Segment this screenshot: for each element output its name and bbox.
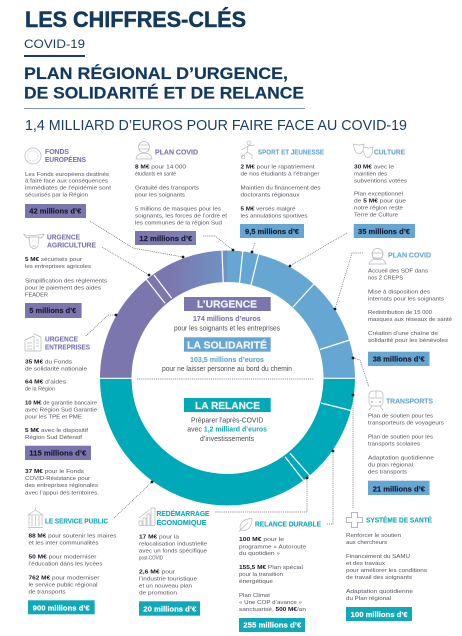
panel: plan covid solidarité: 38 millions d’€: [373, 355, 425, 364]
center: l'urgence: pour les soignants et les entreprises: [174, 325, 280, 332]
center: la solidarité: LA SOLIDARITÉ: [187, 338, 267, 351]
panel: le service public: 762 M€ pour moderniser: [28, 575, 100, 581]
panel: plan covid solidarité: Création d’une chaîne de: [368, 331, 438, 337]
icon: office buildings: [25, 334, 41, 351]
panel: urgence agriculture: Simplification des règlements: [25, 279, 107, 285]
panel: transports: Plan de soutien pour les: [368, 434, 433, 440]
panel: plan covid solidarité: internats pour les soignants: [368, 296, 444, 302]
panel: fonds européens: [25, 148, 111, 218]
panel: urgence entreprises: URGENCE: [45, 336, 78, 343]
panel: plan covid solidarité: Redistribution de 15 000: [368, 310, 432, 316]
panel: redémarrage économique: [139, 508, 210, 616]
panel: fonds européens: Les Fonds européens destinés: [25, 172, 109, 178]
panel: le service public: 900 millions d’€: [33, 603, 90, 612]
panel: plan covid urgence: 12 millions d’€: [139, 234, 193, 243]
panel: redémarrage économique: 17 M€ pour la: [139, 534, 180, 540]
panel: système de santé: SYSTÈME DE SANTÉ: [366, 516, 432, 525]
panel: urgence entreprises: avec Région Sud Garantie: [25, 407, 97, 413]
panel: urgence agriculture: 5 millions d’€: [29, 306, 77, 315]
panel: sport et jeunesse: 2 M€ pour le rapatriement: [240, 164, 315, 170]
icon: train: [369, 391, 383, 410]
panel: système de santé: pour améliorer les conditions: [346, 568, 427, 574]
panel: culture: Plan exceptionnel: [354, 192, 403, 198]
panel: culture: 30 M€ avec le: [354, 164, 394, 170]
panel: transports: du plan régional: [368, 462, 413, 468]
panel: plan covid solidarité: solidarité pour les bénévoles: [368, 338, 448, 344]
panel: plan covid solidarité: Mise à disposition des: [368, 289, 430, 295]
panel: transports: transports scolaires: [368, 441, 420, 447]
panel: fonds européens: immédiates de l’épidémie sont: [25, 186, 111, 192]
panel: fonds européens: EUROPÉENS: [45, 155, 86, 164]
icon: cow head: [23, 234, 45, 248]
panel: urgence entreprises: 5 M€ avec le dispositif: [25, 428, 88, 434]
panel: le service public: 88 M€ pour soutenir les maires: [28, 533, 117, 539]
panel: transports: des transports: [368, 469, 407, 475]
panel: transports: TRANSPORTS: [386, 398, 433, 405]
panel: urgence entreprises: 35 M€ du Fonds: [25, 360, 72, 366]
panel: système de santé: du Plan régional: [346, 596, 391, 602]
panel: culture: maintien des: [354, 171, 387, 177]
icon: rising bars: [139, 508, 155, 526]
panel: urgence agriculture: 5 M€ sécurisés pour: [25, 257, 82, 263]
center: la relance: d’investissements: [200, 436, 254, 443]
panel: plan covid urgence: Gratuité des transports: [135, 185, 199, 191]
panel: urgence entreprises: COVID-Résistance pour: [25, 476, 90, 482]
panel: redémarrage économique: 2,6 M€ pour: [139, 570, 175, 576]
panel: relance durable: programme « Autoroute: [239, 544, 306, 550]
icon: footballer: [241, 141, 254, 159]
center: la solidarité: 103,5 millions d’euros: [190, 355, 264, 364]
panel: urgence entreprises: ENTREPRISES: [45, 345, 90, 352]
panel: urgence entreprises: 115 millions d’€: [29, 449, 87, 458]
panel: culture: notre région reste: [354, 206, 403, 212]
panel: culture: de 5 M€ pour que: [354, 199, 406, 205]
panel: relance durable: « Une COP d’avance »: [239, 600, 302, 606]
panel: plan covid solidarité: [368, 248, 452, 366]
panel: le service public: le service public régional: [28, 582, 98, 588]
panel: système de santé: aux chercheurs: [346, 540, 387, 546]
panel: sport et jeunesse: doctorants régionaux: [240, 192, 300, 198]
icon: euro stars circle: [25, 148, 41, 164]
panel: plan covid urgence: 5 millions de masques pour les: [135, 206, 221, 212]
panel: urgence entreprises: [25, 334, 99, 496]
panel: redémarrage économique: REDÉMARRAGE: [156, 509, 210, 518]
panel: redémarrage économique: de promotion: [139, 591, 177, 597]
panel: sport et jeunesse: Maintien du financement des: [240, 185, 321, 191]
panel: redémarrage économique: post-COVID: [139, 556, 163, 562]
panel: culture: CULTURE: [374, 149, 405, 156]
panel: transports: Adaptation quotidienne: [368, 455, 434, 461]
heading: plan régional: [24, 64, 305, 109]
panel: urgence entreprises: des entreprises régionales: [25, 483, 98, 489]
panel: culture: subventions votées: [354, 178, 407, 184]
panel: plan covid solidarité: nos 2 CREPS: [368, 275, 403, 281]
panel: plan covid urgence: 8 M€ pour 14 000: [135, 164, 186, 170]
center: la solidarité: [162, 337, 292, 373]
panel: le service public: de transports: [28, 589, 66, 595]
panel: urgence entreprises: pour les TPE et PME: [25, 414, 82, 420]
panel: plan covid urgence: [135, 142, 227, 245]
panel: sport et jeunesse: les annulations sportives: [240, 213, 308, 219]
panel: transports: transporteurs de voyageurs: [368, 421, 444, 427]
panel: sport et jeunesse: [240, 141, 324, 238]
panel: relance durable: [239, 518, 321, 632]
panel: relance durable: pour la transition: [239, 572, 283, 578]
panel: urgence agriculture: les entreprises agricoles: [25, 264, 91, 270]
panel: plan covid urgence: les communes de la région Sud: [135, 220, 222, 226]
panel: sport et jeunesse: 5 M€ versés malgré: [240, 206, 296, 212]
icon: theatre masks: [354, 144, 373, 158]
panel: urgence entreprises: 37 M€ pour le Fonds: [25, 469, 84, 475]
center: l'urgence: 174 millions d’euros: [193, 314, 261, 323]
title: COVID-19: [24, 37, 85, 51]
panel: plan covid solidarité: Accueil des SDF dans: [368, 268, 428, 274]
center: la relance: avec 1,2 milliard d’euros: [187, 427, 267, 434]
panel: redémarrage économique: ÉCONOMIQUE: [156, 518, 207, 527]
panel: sport et jeunesse: 9,5 millions d’€: [245, 227, 300, 236]
center: la relance: LA RELANCE: [195, 401, 260, 412]
panel: urgence agriculture: pour le paiement des aides: [25, 286, 101, 292]
panel: relance durable: sanctuarisé, 500 M€ /an: [239, 607, 306, 613]
panel: relance durable: 255 millions d’€: [243, 621, 302, 630]
panel: culture: 35 millions d’€: [358, 227, 411, 236]
panel: fonds européens: FONDS: [45, 149, 69, 156]
panel: transports: Plan de soutien pour les: [368, 414, 433, 420]
panel: transports: 21 millions d’€: [373, 484, 426, 493]
panel: relance durable: du quotidien »: [239, 551, 280, 557]
panel: relance durable: énergétique: [239, 579, 273, 585]
heading: plan régional: PLAN RÉGIONAL D’URGENCE,: [24, 64, 288, 83]
icon: leaf: [239, 518, 252, 532]
panel: sport et jeunesse: SPORT ET JEUNESSE: [258, 149, 324, 156]
subtitle: 1,4 MILLIARD D’EUROS POUR FAIRE FACE AU COVID-19: [25, 118, 407, 134]
panel: redémarrage économique: 20 millions d’€: [143, 605, 197, 614]
icon: masked person: [369, 248, 386, 264]
panel: urgence entreprises: de solidarité nationale: [25, 367, 87, 373]
panel: plan covid urgence: soignants, les forces de l’ordre et: [135, 213, 227, 219]
panel: urgence entreprises: de la Région: [25, 386, 55, 392]
panel: système de santé: Financement du SAMU: [346, 554, 410, 560]
panel: fonds européens: à faire face aux conséquences: [25, 179, 108, 185]
center: l'urgence: [174, 297, 280, 332]
panel: système de santé: [346, 512, 432, 621]
panel: le service public: [28, 508, 117, 614]
panel: redémarrage économique: et un nouveau plan: [139, 584, 192, 590]
leader lines: [86, 221, 369, 524]
panel: relance durable: 155,5 M€ Plan spécial: [239, 565, 303, 571]
panel: urgence entreprises: avec l’appui des territoires.: [25, 490, 99, 496]
panel: urgence entreprises: Région Sud Défensif: [25, 435, 82, 441]
panel: plan covid urgence: étudiants en santé: [135, 171, 176, 177]
panel: sport et jeunesse: de nos étudiants à l’étranger: [240, 171, 320, 177]
panel: le service public: l’éducation dans les lycées: [28, 561, 103, 567]
icon: masked doctor: [136, 142, 152, 159]
panel: fonds européens: 42 millions d’€: [29, 207, 82, 216]
center: l'urgence: L’URGENCE: [197, 300, 257, 311]
panel: le service public: LE SERVICE PUBLIC: [45, 518, 108, 525]
icon: medical cross: [346, 512, 362, 528]
panel: relance durable: Plan Climat: [239, 593, 270, 599]
panel: culture: [354, 144, 415, 238]
panel: système de santé: 100 millions d’€: [351, 610, 408, 619]
panel: urgence agriculture: URGENCE: [47, 235, 80, 242]
heading: plan régional: DE SOLIDARITÉ ET DE RELANCE: [24, 84, 304, 103]
panel: plan covid urgence: pour les soignants: [135, 192, 185, 198]
panel: plan covid solidarité: PLAN COVID: [388, 253, 431, 260]
panel: relance durable: RELANCE DURABLE: [255, 522, 321, 529]
panel: système de santé: et des travaux: [346, 561, 385, 567]
panel: système de santé: Renforcer le soutien: [346, 533, 401, 539]
title: [24, 7, 246, 57]
icon: public building: [28, 508, 43, 528]
panel: relance durable: 100 M€ pour le: [239, 537, 284, 543]
panel: fonds européens: sécurisés par la Région: [25, 193, 88, 199]
panel: plan covid solidarité: masques aux réseaux de santé: [368, 317, 452, 323]
panel: urgence entreprises: 64 M€ d’aides: [25, 379, 66, 385]
title: LES CHIFFRES-CLÉS: [25, 7, 246, 32]
panel: le service public: et les inter communalités: [28, 540, 99, 546]
panel: le service public: 50 M€ pour moderniser: [28, 554, 97, 560]
panel: urgence entreprises: 10 M€ de garantie bancaire: [25, 400, 97, 406]
center: la solidarité: pour ne laisser personne au bord du chemin: [162, 366, 292, 373]
center: la relance: Préparer l’après-COVID: [191, 417, 263, 424]
panel: transports: [368, 391, 444, 495]
donut chart: [99, 249, 356, 506]
panel: redémarrage économique: l’industrie touristique: [139, 577, 197, 583]
panel: plan covid urgence: PLAN COVID: [155, 149, 198, 156]
panel: culture: Terre de Culture: [354, 213, 398, 219]
panel: système de santé: Adaptation quotidienne: [346, 589, 413, 595]
panel: urgence agriculture: [23, 234, 107, 318]
panel: urgence agriculture: AGRICULTURE: [47, 243, 96, 250]
center: la relance: [184, 398, 271, 443]
panel: redémarrage économique: relocalisation industrielle: [139, 541, 207, 547]
panel: redémarrage économique: avec un fonds spécifique: [139, 549, 207, 555]
panel: système de santé: de travail des soignants: [346, 575, 412, 581]
panel: urgence agriculture: FEADER: [25, 292, 48, 298]
